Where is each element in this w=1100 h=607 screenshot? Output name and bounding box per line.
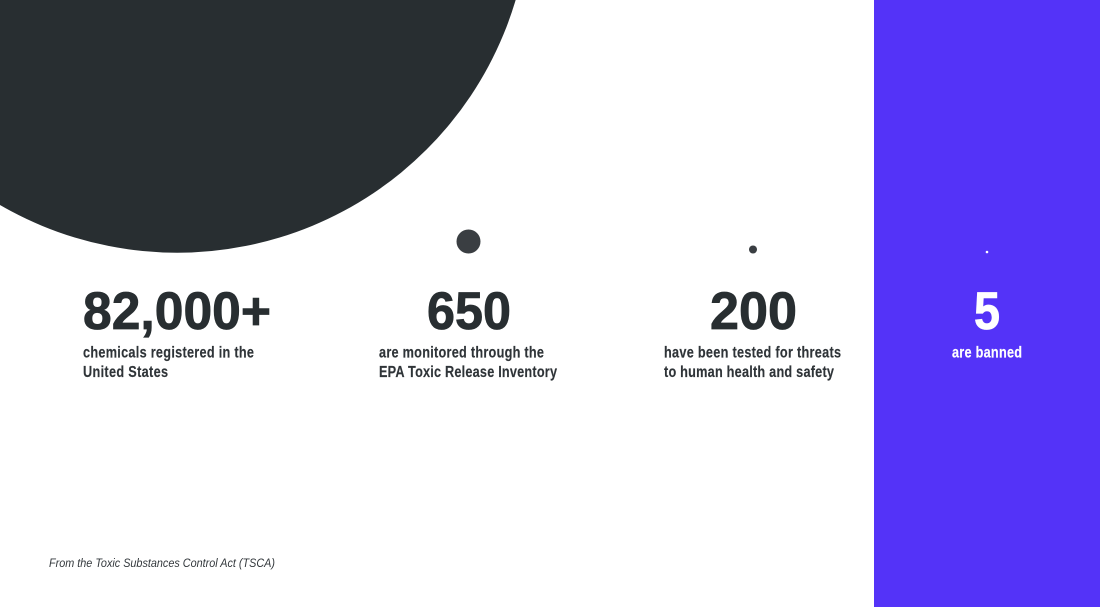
text: monitored description: EPA Toxic Release Inventory xyxy=(379,364,557,381)
text: monitored description xyxy=(379,344,557,381)
stat: 82,000+ chemicals registered xyxy=(83,282,271,381)
number: 5: 5 xyxy=(974,282,1000,341)
number: 650: 650 xyxy=(427,282,511,341)
text: chemicals registered description xyxy=(83,344,254,381)
circle: 5 xyxy=(986,251,988,253)
footnote: source: From the Toxic Substances Control Act (TSCA) xyxy=(49,556,275,570)
stat: 200 tested xyxy=(664,246,841,381)
text: chemicals registered description: chemicals registered in the xyxy=(83,344,254,362)
text: chemicals registered description: United States xyxy=(83,364,168,381)
text: banned description: are banned xyxy=(952,344,1022,362)
stat: 5 banned xyxy=(952,251,1022,362)
stat: 650 monitored xyxy=(379,230,557,381)
text: tested description: to human health and safety xyxy=(664,364,834,381)
circle: 200 xyxy=(749,246,757,254)
panel: purple banned column background xyxy=(874,0,1100,607)
text: tested description xyxy=(664,344,841,381)
circle: 650 xyxy=(456,230,480,254)
number: 82,000+: 82,000+ xyxy=(83,282,271,341)
text: tested description: have been tested for threats xyxy=(664,344,841,362)
large circle: 82,000 chemicals xyxy=(0,0,530,253)
number: 200: 200 xyxy=(710,282,797,341)
text: monitored description: are monitored through the xyxy=(379,344,544,362)
